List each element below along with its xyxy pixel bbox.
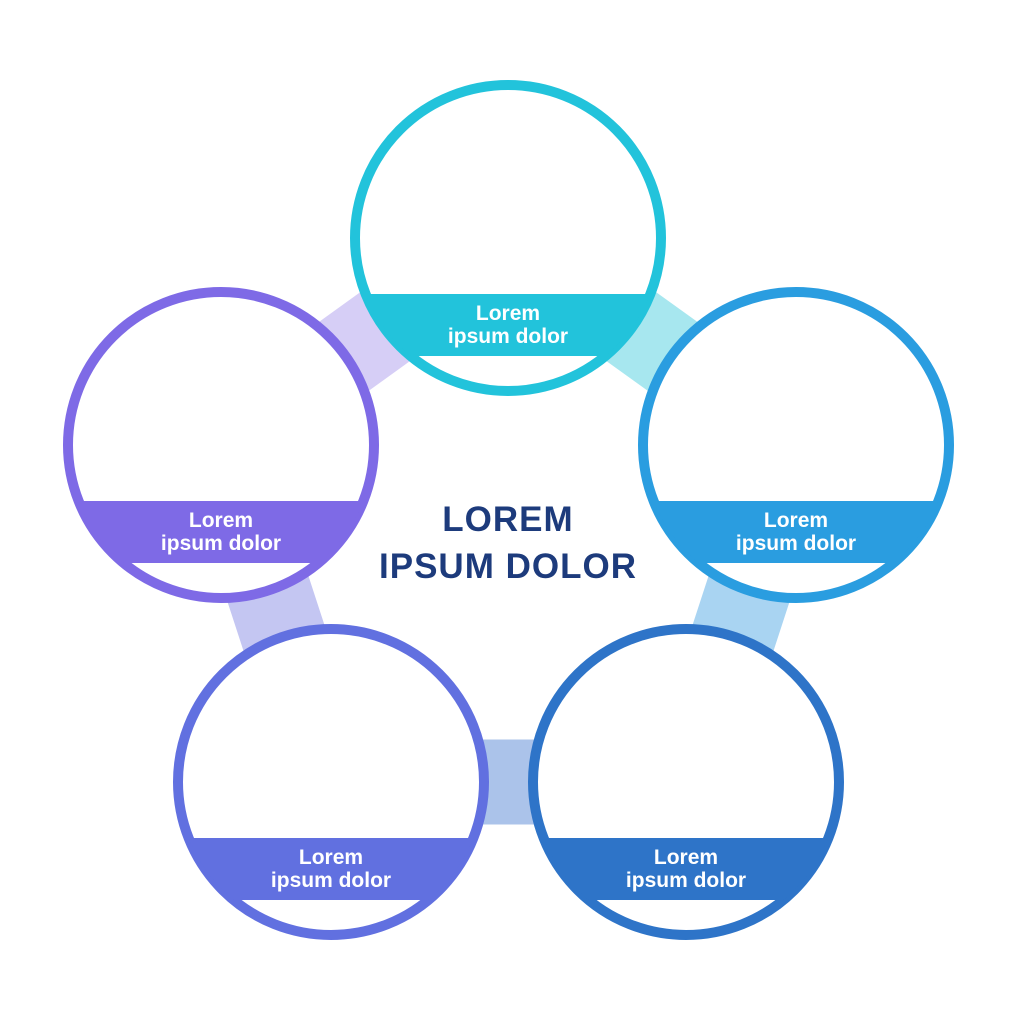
circle: bottom left: Lorem <box>299 846 363 869</box>
connectors <box>221 238 796 782</box>
circle: top: Lorem <box>476 302 540 325</box>
circle: left: ipsum dolor <box>161 532 281 555</box>
circle: bottom left <box>163 629 503 935</box>
circle: left <box>53 292 393 598</box>
circle: right: ipsum dolor <box>736 532 856 555</box>
circle: right: Lorem <box>764 509 828 532</box>
title: LOREM <box>442 500 574 539</box>
title <box>379 500 637 586</box>
title: IPSUM DOLOR <box>379 547 637 586</box>
circle: bottom right: Lorem <box>654 846 718 869</box>
circle: top <box>340 85 680 391</box>
circle: top: ipsum dolor <box>448 325 568 348</box>
circle: right <box>628 292 968 598</box>
circle: left: Lorem <box>189 509 253 532</box>
circle: bottom left: ipsum dolor <box>271 869 391 892</box>
circle: bottom right: ipsum dolor <box>626 869 746 892</box>
circle: bottom right <box>518 629 858 935</box>
